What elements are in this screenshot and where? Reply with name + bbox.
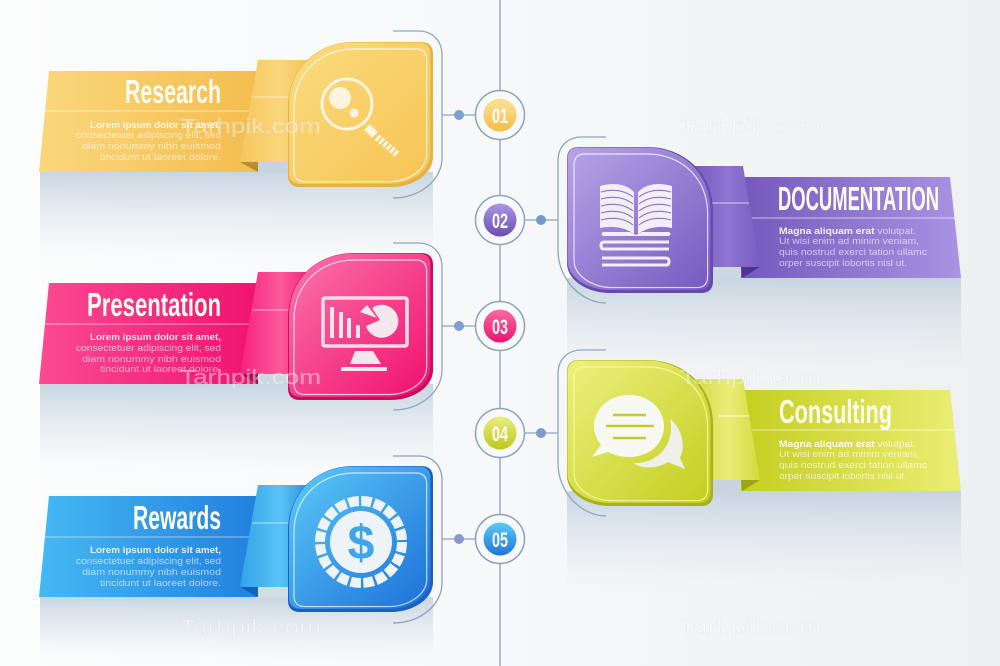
rewards connector bracket (393, 456, 475, 623)
badge 03: 03 (492, 316, 508, 339)
panel: documentation (525, 137, 961, 303)
research body text (76, 120, 221, 163)
consulting body text: Magna aliquam erat volutpat. (779, 439, 916, 450)
research fold shadow (240, 162, 258, 172)
panel: rewards (39, 456, 475, 623)
rewards body text: diam nonummy nibh euismod (82, 567, 221, 578)
watermarks: Tarhpik.com (680, 617, 821, 639)
presentation ribbon divider (45, 323, 250, 325)
presentation body text: consectetuer adipiscing elit, sed (76, 343, 221, 354)
watermarks: Tarhpik.com (680, 116, 821, 138)
research card (288, 42, 433, 187)
consulting title: Consulting (779, 393, 892, 430)
watermarks: Tarhpik.com (180, 617, 321, 639)
documentation connector dot (536, 215, 546, 225)
research connector dot (454, 110, 464, 120)
watermarks: Tarhpik.com (180, 367, 321, 389)
badge 04 (476, 408, 524, 458)
badge 03 (476, 302, 524, 350)
rewards body text: Lorem ipsum dolor sit amet, (90, 545, 221, 556)
presentation fold shadow (240, 374, 258, 384)
watermarks (180, 116, 821, 639)
documentation ribbon (741, 177, 961, 278)
rewards ribbon fold (240, 485, 320, 587)
research ribbon (39, 71, 258, 172)
panel: consulting (525, 350, 961, 516)
badge 02 (476, 196, 524, 244)
consulting body text: quis nostrud exerci tation ullamc (779, 460, 927, 471)
presentation body text: Lorem ipsum dolor sit amet, (90, 332, 221, 343)
research body text: diam nonummy nibh euismod (82, 141, 221, 152)
badge 01 (476, 90, 524, 140)
documentation connector bracket (525, 137, 606, 303)
badge 02: 02 (492, 210, 508, 233)
research fold line (252, 96, 295, 98)
documentation fold shadow (741, 267, 760, 278)
icon: open book on stack (600, 184, 672, 265)
research connector bracket (393, 31, 475, 198)
documentation ribbon divider (752, 217, 955, 219)
research body text: consectetuer adipiscing elit, sed (76, 130, 221, 141)
panel: presentation (39, 243, 475, 410)
documentation body text (779, 226, 927, 269)
rewards body text (76, 545, 221, 589)
watermarks: Tarhpik.com (180, 116, 321, 138)
presentation body text: diam nonummy nibh euismod (82, 354, 221, 365)
presentation ribbon (39, 283, 258, 384)
presentation ribbon fold (240, 272, 320, 374)
documentation ribbon fold (680, 166, 760, 267)
rewards ribbon divider (45, 536, 250, 538)
presentation body text: tincidunt ut laoreet dolore. (100, 364, 221, 375)
icon: chat bubbles (592, 395, 685, 469)
rewards fold shadow (240, 587, 258, 597)
rewards ribbon (39, 496, 258, 597)
ribbon shadows (40, 160, 961, 666)
consulting connector bracket (525, 350, 606, 516)
presentation fold line (252, 309, 295, 311)
documentation body text: Magna aliquam erat volutpat. (779, 226, 916, 237)
rewards body text: consectetuer adipiscing elit, sed (76, 556, 221, 567)
badge 01: 01 (492, 105, 508, 128)
icon: dollar chip: $ (348, 517, 375, 570)
documentation card (567, 147, 713, 293)
research body text: tincidunt ut laoreet dolore. (100, 152, 221, 163)
badge 05: 05 (492, 529, 508, 552)
consulting fold line (718, 415, 749, 417)
documentation body text: quis nostrud exerci tation ullamc (779, 247, 927, 258)
rewards body text: tincidunt ut laoreet dolore. (100, 578, 221, 589)
research body text: Lorem ipsum dolor sit amet, (90, 120, 221, 131)
consulting ribbon fold (680, 379, 760, 480)
consulting card (567, 360, 713, 506)
rewards card (288, 466, 433, 612)
research title: Research (125, 73, 221, 110)
documentation body text: Ut wisi enim ad minim veniam, (779, 236, 919, 247)
consulting ribbon divider (752, 429, 955, 431)
watermarks: Tarhpik.com (680, 367, 821, 389)
rewards fold line (252, 522, 295, 524)
timeline axis (499, 0, 501, 666)
presentation body text (76, 332, 221, 375)
presentation connector dot (454, 321, 464, 331)
presentation title: Presentation (87, 286, 221, 323)
presentation connector bracket (393, 243, 475, 410)
rewards title: Rewards (133, 499, 221, 536)
icon: monitor with charts (323, 298, 407, 371)
consulting body text (779, 439, 927, 482)
consulting fold shadow (741, 480, 760, 491)
research ribbon divider (45, 110, 250, 112)
presentation card (288, 253, 433, 400)
rewards connector dot (454, 534, 464, 544)
panel: research (39, 31, 475, 198)
documentation body text: orper suscipit lobortis nisl ut. (779, 258, 907, 269)
badge 04: 04 (492, 423, 508, 446)
consulting body text: orper suscipit lobortis nisl ut. (779, 471, 907, 482)
consulting connector dot (536, 428, 546, 438)
icon: dollar chip (320, 501, 402, 583)
icon: magnifying glass (322, 79, 398, 155)
consulting body text: Ut wisi enim ad minim veniam, (779, 449, 919, 460)
consulting ribbon (741, 390, 961, 491)
documentation fold line (710, 202, 749, 204)
badge 05 (476, 514, 524, 564)
research ribbon fold (240, 60, 320, 162)
